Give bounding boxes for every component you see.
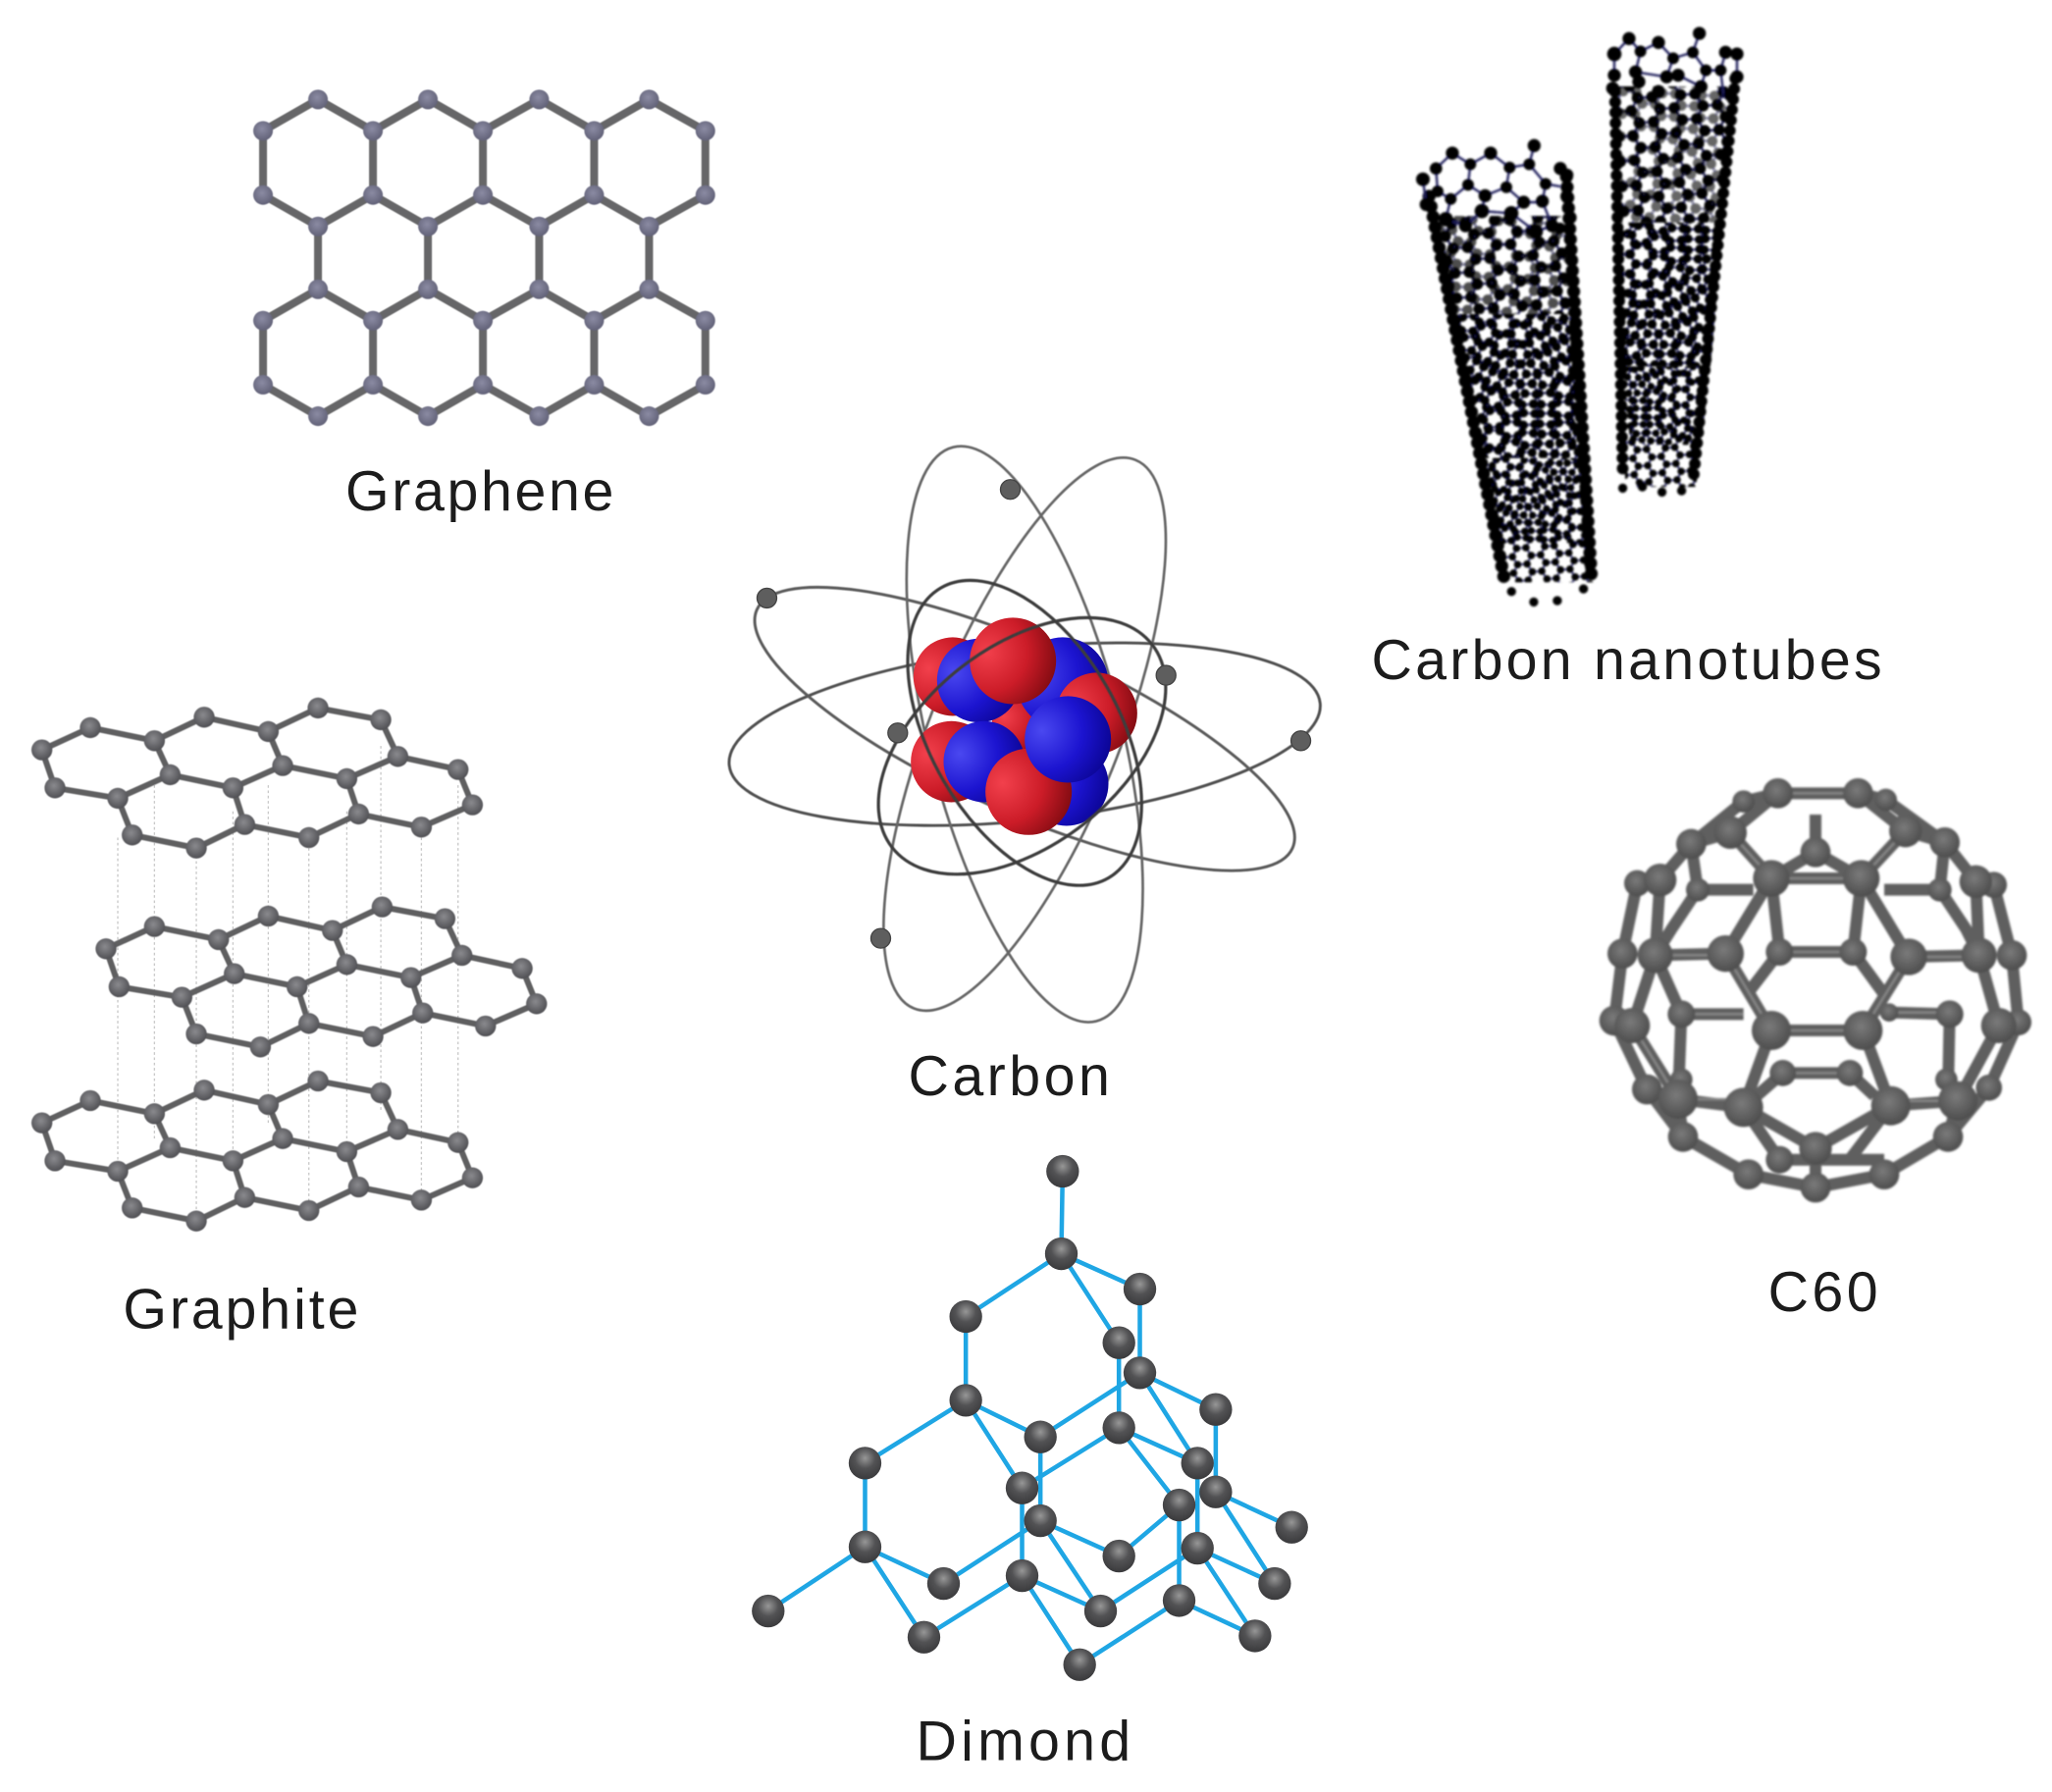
nucleus: protons and neutrons xyxy=(911,617,1137,835)
graphite layer: top xyxy=(31,698,483,859)
graphite interlayer dashed lines xyxy=(118,746,458,1231)
panel: graphite xyxy=(31,698,547,1342)
panel: diamond xyxy=(752,1155,1308,1773)
nanotube: left tube xyxy=(1416,139,1594,606)
label: Dimond: Dimond xyxy=(916,1711,1131,1773)
graphite layer: middle xyxy=(95,896,547,1057)
diamond lattice bonds xyxy=(768,1172,1291,1664)
label: Carbon: Carbon xyxy=(908,1045,1110,1108)
label: Graphite: Graphite xyxy=(123,1279,358,1342)
panel: carbon atom xyxy=(720,424,1329,1108)
panel: graphene xyxy=(253,89,715,523)
panel: carbon nanotubes xyxy=(1372,26,1882,692)
graphite layer: bottom xyxy=(31,1071,483,1232)
label: Carbon nanotubes: Carbon nanotubes xyxy=(1372,629,1882,692)
inner electron orbits xyxy=(831,541,1213,925)
electrons xyxy=(757,480,1311,948)
C60 buckyball xyxy=(1600,778,2031,1202)
label: Graphene: Graphene xyxy=(345,460,613,523)
diamond lattice atoms xyxy=(752,1155,1308,1681)
outer electron orbits xyxy=(720,424,1329,1044)
panel: C60 fullerene xyxy=(1600,778,2031,1324)
label: C60: C60 xyxy=(1768,1261,1878,1324)
nanotube: right tube xyxy=(1606,26,1744,497)
graphene honeycomb lattice xyxy=(253,89,715,426)
